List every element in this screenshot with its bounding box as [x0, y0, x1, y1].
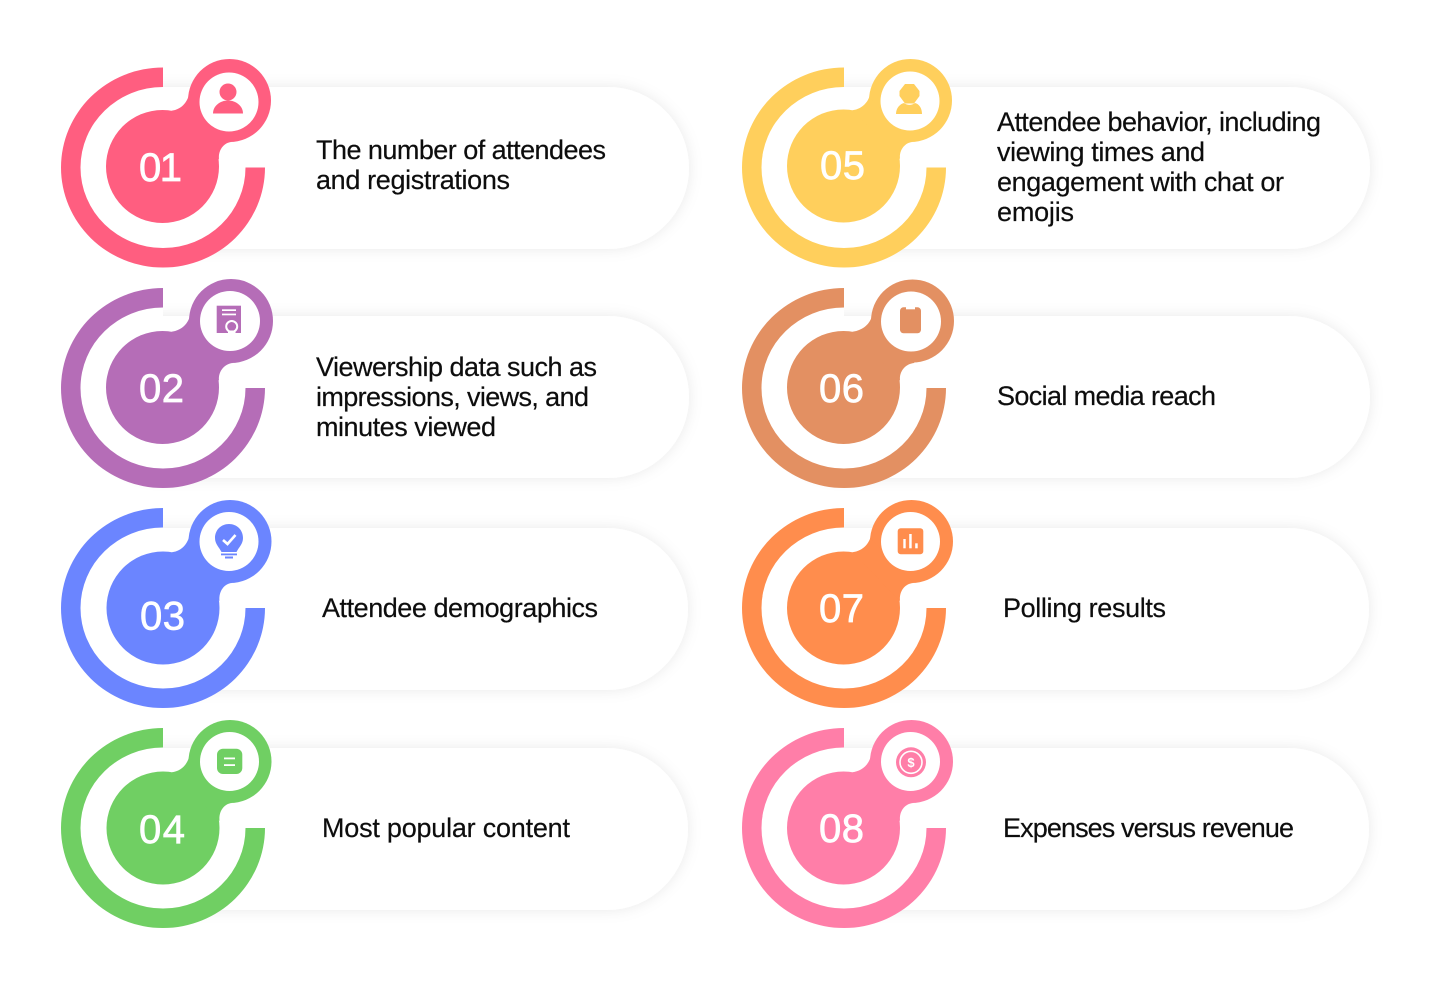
number 05: 05	[820, 144, 865, 188]
icon: clipboard	[881, 292, 941, 352]
description 02: impressions, views, and	[316, 382, 589, 412]
progress ring 07	[742, 508, 946, 708]
description 08: Expenses versus revenue	[1003, 813, 1294, 843]
icon: light bulb with check	[200, 512, 258, 571]
number 07: 07	[819, 587, 864, 631]
number disc and icon badge 01	[106, 59, 271, 223]
number 08: 08	[819, 807, 864, 851]
description 05: viewing times and	[997, 137, 1205, 167]
number 01: 01	[139, 146, 182, 190]
icon: bar chart	[881, 512, 940, 571]
description 07: Polling results	[1003, 593, 1166, 623]
pill card 05	[763, 87, 1370, 249]
description 03: Attendee demographics	[322, 593, 598, 623]
pill card 06	[763, 316, 1370, 478]
number disc and icon badge 02	[106, 279, 273, 444]
number 02: 02	[139, 367, 184, 411]
panel: item 04 most popular content	[61, 720, 688, 928]
progress ring 04	[61, 728, 265, 928]
progress ring 06	[742, 288, 946, 488]
description 01	[316, 135, 606, 195]
progress ring 05	[742, 68, 946, 268]
pill card 02	[82, 316, 689, 478]
description 06: Social media reach	[997, 381, 1216, 411]
description 01: and registrations	[316, 165, 510, 195]
panel: item 08 expenses versus revenue	[742, 720, 1369, 928]
number disc and icon badge 05	[787, 59, 952, 222]
pill card 01	[82, 87, 689, 249]
pill card 04	[82, 748, 688, 910]
icon: person	[200, 72, 258, 132]
pill card 03	[82, 528, 688, 690]
icon: dollar coin: $	[907, 755, 915, 770]
panel: item 06 social media reach	[742, 280, 1370, 488]
panel: item 05 attendee behavior	[742, 59, 1370, 268]
description 01: The number of attendees	[316, 135, 606, 165]
description 02: minutes viewed	[316, 412, 496, 442]
number 04: 04	[139, 808, 185, 852]
description 02	[316, 352, 597, 442]
description 04: Most popular content	[322, 813, 570, 843]
description 02: Viewership data such as	[316, 352, 597, 382]
number disc and icon badge 04	[106, 720, 272, 884]
panel: item 01 attendees and registrations	[61, 59, 689, 268]
panel: item 03 attendee demographics	[61, 500, 688, 708]
icon: rounded square document	[200, 732, 259, 791]
icon: support person	[880, 72, 940, 130]
progress ring 02	[61, 288, 265, 488]
progress ring 03	[61, 508, 265, 708]
number disc and icon badge 08	[787, 720, 953, 884]
description 05: Attendee behavior, including	[997, 107, 1321, 137]
number disc and icon badge 03	[106, 500, 272, 664]
number disc and icon badge 07	[787, 500, 953, 664]
pill card 07	[763, 528, 1369, 690]
number 06: 06	[819, 367, 864, 411]
number disc and icon badge 06	[787, 280, 954, 444]
panel: item 02 viewership data	[61, 279, 689, 488]
icon: certificate document	[200, 291, 260, 351]
panel: item 07 polling results	[742, 500, 1369, 708]
number 03: 03	[140, 594, 185, 638]
description 05	[997, 107, 1321, 227]
pill card 08	[763, 748, 1369, 910]
progress ring 01	[61, 68, 265, 268]
progress ring 08	[742, 728, 946, 928]
description 05: engagement with chat or	[997, 167, 1284, 197]
description 05: emojis	[997, 197, 1074, 227]
icon: dollar coin	[881, 732, 940, 791]
